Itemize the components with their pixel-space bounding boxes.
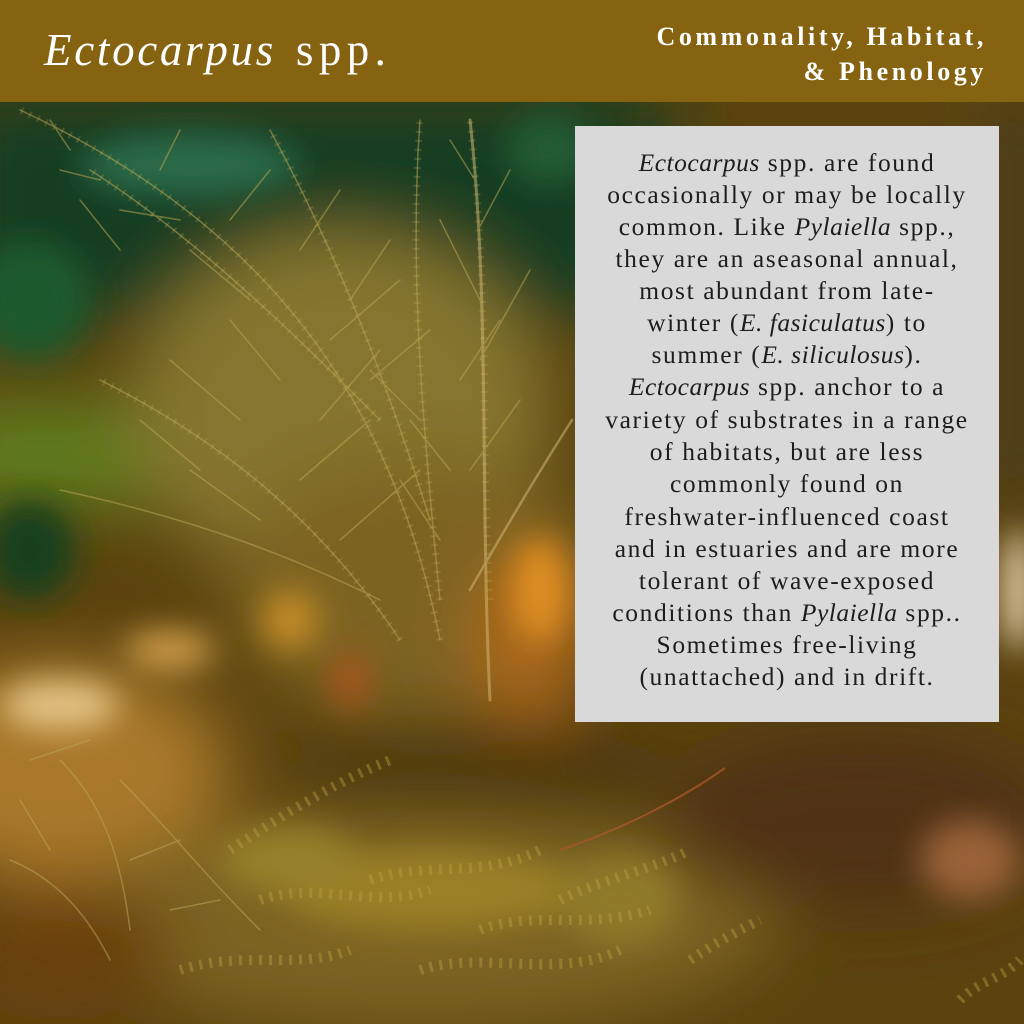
text panel: description: they are an aseasonal annual, xyxy=(615,244,959,273)
fine fronds xyxy=(10,110,572,960)
text panel: description: tolerant of wave-exposed xyxy=(639,566,935,595)
text panel: description: (unattached) and in drift. xyxy=(639,662,935,691)
text panel: description: of habitats, but are less xyxy=(650,437,924,466)
text panel: description: commonly found on xyxy=(670,469,904,498)
text panel: description: most abundant from late- xyxy=(639,276,935,305)
text panel: description: Ectocarpus spp. anchor to a xyxy=(629,372,945,401)
title: Ectocarpus spp. xyxy=(44,25,391,75)
text panel: description: and in estuaries and are more xyxy=(615,534,959,563)
subtitle: Commonality, Habitat, xyxy=(656,22,987,51)
text panel: description: conditions than Pylaiella spp.. xyxy=(612,598,962,627)
text panel: description: freshwater-influenced coast xyxy=(624,502,950,531)
text panel: description: summer (E. siliculosus). xyxy=(652,340,922,369)
text panel: description xyxy=(575,126,999,722)
text panel: description: Sometimes free-living xyxy=(657,630,917,659)
tufted clumps xyxy=(180,760,1020,1000)
red strand xyxy=(560,768,725,850)
text panel: description: variety of substrates in a range xyxy=(605,405,969,434)
text panel: description: winter (E. fasiculatus) to xyxy=(647,308,927,337)
subtitle xyxy=(656,22,987,86)
text panel: description: Ectocarpus spp. are found xyxy=(639,148,935,177)
text panel: description: occasionally or may be locally xyxy=(607,180,967,209)
header bar xyxy=(0,0,1024,102)
text panel: description: common. Like Pylaiella spp., xyxy=(619,212,955,241)
subtitle: & Phenology xyxy=(804,57,987,86)
